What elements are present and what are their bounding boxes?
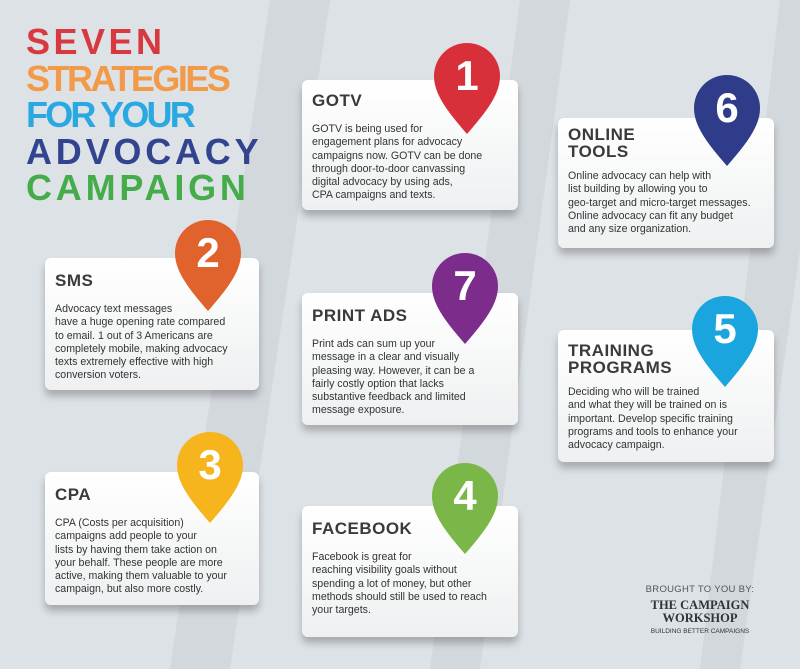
card: CPA: CPA (55, 485, 91, 504)
card: training programs: TRAINING (568, 341, 654, 360)
card: online tools: geo-target and micro-target messages. (568, 197, 751, 209)
card: GOTV: GOTV is being used for (312, 123, 423, 135)
title: SEVEN (26, 21, 166, 62)
card: GOTV: GOTV (312, 91, 362, 110)
pin 2 (175, 220, 241, 311)
credit: BROUGHT TO YOU BY: (646, 584, 754, 595)
pin 7: 7 (453, 262, 477, 309)
title: CAMPAIGN (26, 167, 250, 208)
card: facebook: spending a lot of money, but other (312, 578, 471, 590)
card: CPA: lists by having them take action on (55, 544, 217, 556)
card: CPA: active, making them valuable to your (55, 570, 227, 582)
title: ADVOCACY (26, 130, 262, 172)
credit: WORKSHOP (662, 611, 738, 625)
card: SMS: texts extremely effective with high (55, 356, 213, 368)
card: print ads: message in a clear and visually (312, 351, 459, 363)
card: CPA: campaigns add people to your (55, 530, 197, 542)
pin 5 (692, 296, 758, 387)
card: facebook (302, 506, 518, 637)
card: GOTV: digital advocacy by using ads, (312, 176, 453, 188)
card: SMS: have a huge opening rate compared (55, 316, 225, 328)
card: training programs: important. Develop specific training (568, 413, 733, 425)
pin 6 (694, 75, 760, 166)
pin 4 (432, 463, 498, 554)
card: SMS (45, 258, 259, 390)
card: training programs: Deciding who will be trained (568, 386, 699, 398)
card: online tools (558, 118, 774, 248)
card: online tools: and any size organization. (568, 223, 691, 235)
card: SMS: Advocacy text messages (55, 303, 172, 315)
card: print ads: PRINT ADS (312, 306, 408, 325)
card: print ads (302, 293, 518, 425)
card: training programs: programs and tools to enhance your (568, 426, 738, 438)
pin 7 (432, 253, 498, 344)
card: GOTV (302, 80, 518, 210)
title (26, 21, 262, 208)
pin 3 (177, 432, 243, 523)
card: online tools: TOOLS (568, 142, 629, 161)
card: online tools: Online advocacy can help with (568, 170, 711, 182)
credit (646, 584, 754, 635)
card: online tools: ONLINE (568, 125, 635, 144)
card: online tools: Online advocacy can fit any budget (568, 210, 733, 222)
card: training programs (558, 330, 774, 462)
card: CPA: CPA (Costs per acquisition) (55, 517, 184, 529)
pin 6: 6 (715, 84, 739, 131)
credit: BUILDING BETTER CAMPAIGNS (651, 628, 749, 635)
title: FOR YOUR (26, 94, 193, 135)
card: training programs: advocacy campaign. (568, 439, 665, 451)
card: print ads: pleasing way. However, it can be a (312, 365, 474, 377)
card: CPA: campaign, but also more costly. (55, 583, 203, 595)
card: GOTV: engagement plans for advocacy (312, 136, 462, 148)
card: GOTV: CPA campaigns and texts. (312, 189, 435, 201)
card: print ads: Print ads can sum up your (312, 338, 435, 350)
card: SMS: SMS (55, 271, 93, 290)
card: facebook: reaching visibility goals without (312, 564, 457, 576)
pin 1 (434, 43, 500, 134)
credit: THE CAMPAIGN (651, 598, 749, 612)
card: SMS: to email. 1 out of 3 Americans are (55, 330, 213, 342)
title: STRATEGIES (26, 58, 228, 98)
card: facebook: your targets. (312, 604, 371, 616)
pin 2: 2 (196, 229, 220, 276)
card: GOTV: through door-to-door canvassing (312, 163, 465, 175)
pin 4: 4 (453, 472, 477, 519)
card: facebook: FACEBOOK (312, 519, 412, 538)
card: facebook: Facebook is great for (312, 551, 412, 563)
card: training programs: PROGRAMS (568, 358, 672, 377)
card: print ads: fairly costly option that lacks (312, 378, 444, 390)
card: facebook: methods should still be used to reach (312, 591, 487, 603)
pin 1: 1 (455, 52, 479, 99)
pin 5: 5 (713, 305, 737, 352)
card: GOTV: campaigns now. GOTV can be done (312, 150, 482, 162)
card: SMS: completely mobile, making advocacy (55, 343, 228, 355)
card: CPA: your behalf. These people are more (55, 557, 223, 569)
pin 3: 3 (198, 441, 222, 488)
card: online tools: list building by allowing you to (568, 183, 708, 195)
card: training programs: and what they will be trained on is (568, 399, 727, 411)
card: print ads: substantive feedback and limited (312, 391, 466, 403)
card: CPA (45, 472, 259, 605)
card: print ads: message exposure. (312, 404, 404, 416)
card: SMS: conversion voters. (55, 369, 141, 381)
